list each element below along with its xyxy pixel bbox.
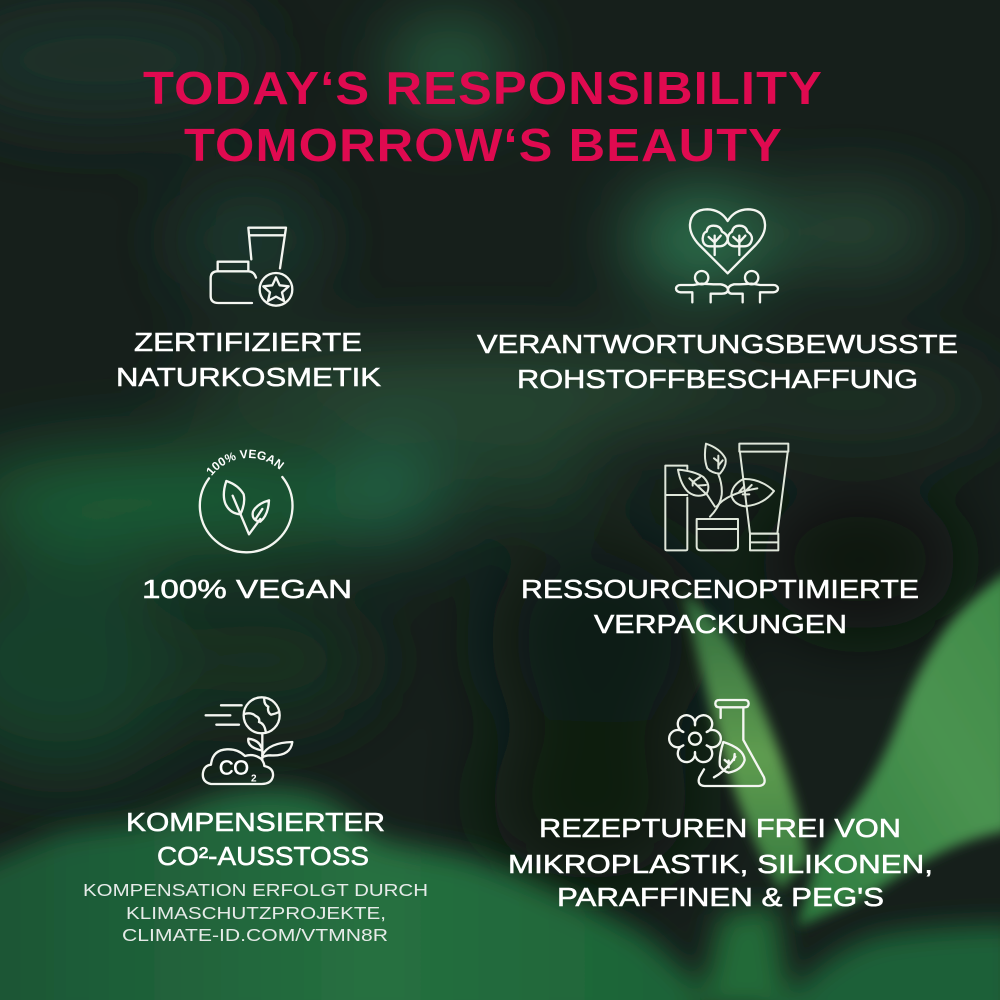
title: TODAY‘S RESPONSIBILITY [143,62,823,114]
icon: flask with flower and leaf [669,700,765,786]
label: REZEPTUREN FREI VON [539,813,901,843]
label: VERANTWORTUNGSBEWUSSTE [477,329,958,359]
icon: heart with trees and two people [676,209,778,302]
label: NATURKOSMETIK [116,362,382,392]
label: PARAFFINEN & PEG'S [557,882,884,912]
panel: kompensierter co2-ausstoss [83,697,428,945]
label [521,574,919,639]
label: ZERTIFIZIERTE [134,327,362,357]
icon: packaging with plant [665,444,788,550]
label [477,329,958,394]
icon: cosmetics jar, tube and star [211,228,292,306]
label: CO²-AUSSTOSS [157,841,369,871]
label: 100% VEGAN [142,574,352,604]
icon: vegan badge with leaves: 100% VEGAN [206,450,284,476]
panel: ressourcenoptimierte verpackungen [521,444,919,639]
label: ROHSTOFFBESCHAFFUNG [517,364,918,394]
label [126,807,385,871]
note: KOMPENSATION ERFOLGT DURCH [83,880,428,900]
panel: verantwortungsbewusste rohstoffbeschaffung [477,209,958,394]
title [143,62,823,171]
label: KOMPENSIERTER [126,807,385,837]
note: KLIMASCHUTZPROJEKTE, [126,903,386,923]
label: VERPACKUNGEN [594,609,847,639]
note [83,880,428,945]
label [116,327,382,392]
label: MIKROPLASTIK, SILIKONEN, [508,849,933,879]
icon: globe flower growing from CO2 cloud: CO [219,757,249,779]
icon: globe flower growing from CO2 cloud: 2 [251,773,257,784]
label [508,813,933,912]
label: RESSOURCENOPTIMIERTE [521,574,919,604]
icon: globe flower growing from CO2 cloud [203,697,292,784]
panel: rezepturen frei von [508,700,933,912]
panel: 100% vegan [142,450,352,604]
title: TOMORROW‘S BEAUTY [184,119,783,171]
panel: zertifizierte naturkosmetik [116,228,382,392]
icon: vegan badge with leaves [198,450,294,554]
note: CLIMATE-ID.COM/VTMN8R [122,925,388,945]
